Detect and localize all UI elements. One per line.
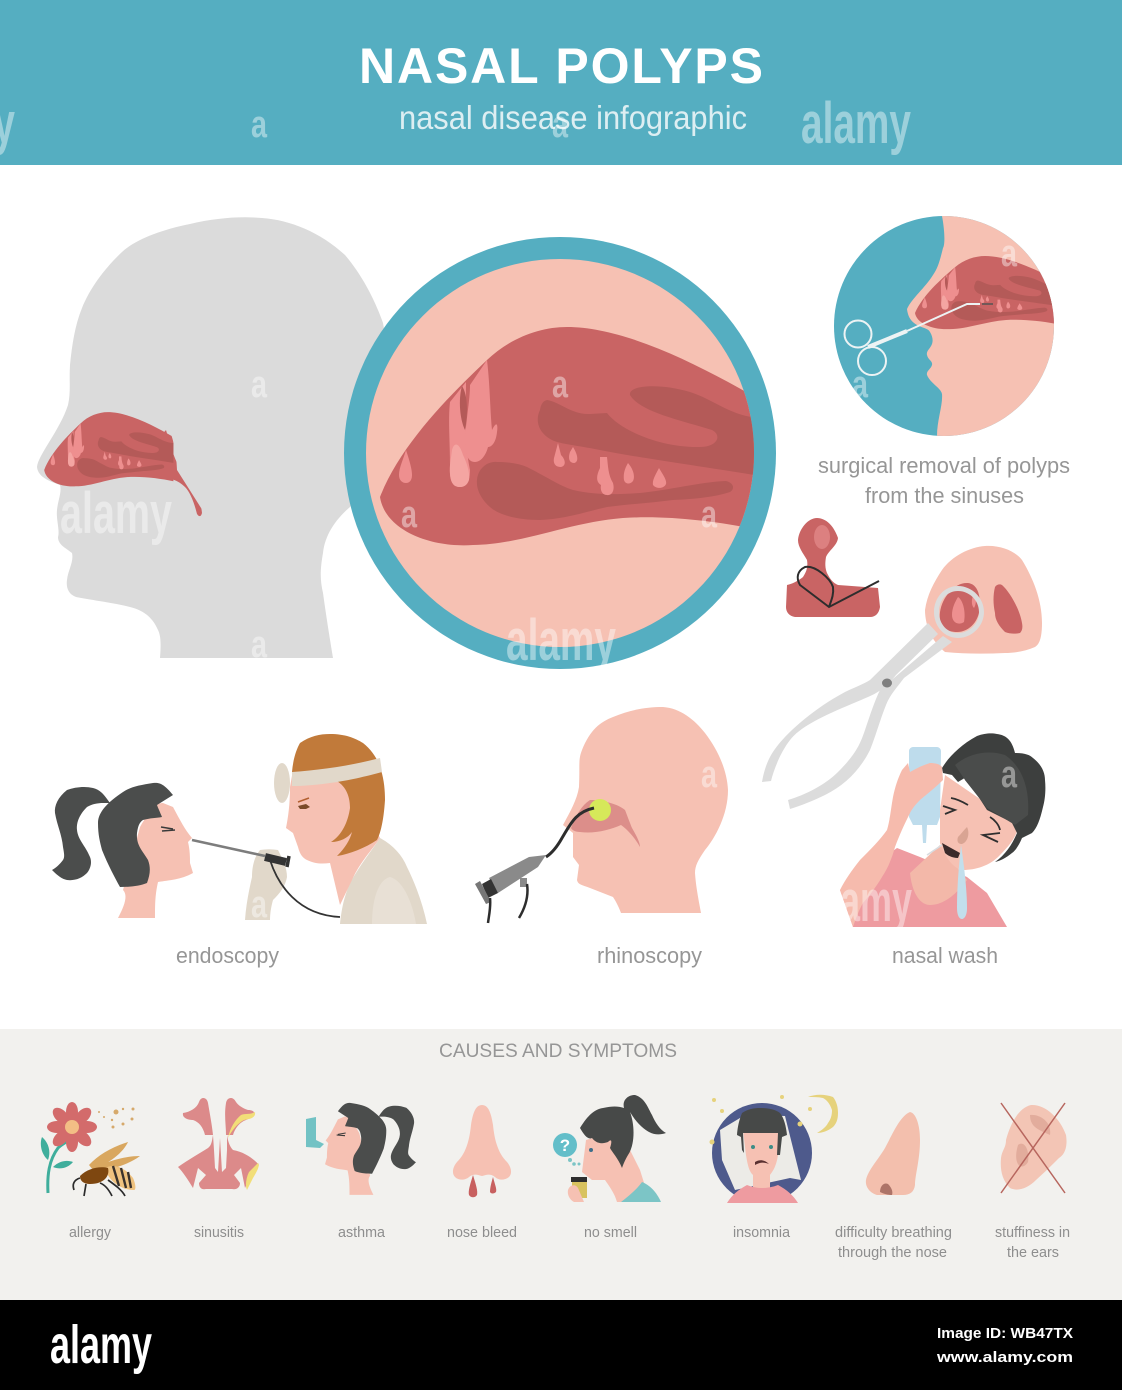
watermarks: a <box>1001 754 1018 796</box>
icon: crossed out ear <box>1001 1103 1067 1193</box>
magnified sinus circle <box>344 237 776 669</box>
grey head profile with sinus <box>37 217 400 658</box>
shirt <box>840 848 1007 927</box>
icon: side nose <box>866 1112 920 1195</box>
endoscopy illustration <box>52 734 427 924</box>
endoscope handle <box>265 857 286 862</box>
nose with forceps <box>762 546 1042 809</box>
watermarks: a <box>251 364 268 406</box>
icon: no smell: ? <box>560 1136 570 1155</box>
rhinoscopy label: rhinoscopy <box>597 943 702 968</box>
watermarks: alamy <box>801 91 911 156</box>
watermarks: a <box>552 104 569 146</box>
difficulty breathing label: difficulty breathing <box>835 1224 952 1241</box>
neck <box>910 845 967 905</box>
stuffiness label <box>995 1224 1070 1261</box>
smelling jar <box>571 1177 587 1182</box>
insomnia label: insomnia <box>733 1224 791 1241</box>
hair <box>942 733 1045 862</box>
watermarks: a <box>552 364 569 406</box>
watermarks: a <box>852 364 869 406</box>
cable <box>270 860 340 917</box>
watermarks: amy <box>840 869 912 934</box>
stars <box>710 1095 812 1144</box>
section heading: CAUSES AND SYMPTOMS <box>439 1041 677 1062</box>
footer url: www.alamy.com <box>936 1349 1073 1366</box>
surgical label: surgical removal of polyps <box>818 453 1070 478</box>
icon: nose bleed <box>453 1105 511 1197</box>
stuffiness label: the ears <box>1007 1244 1059 1261</box>
nose <box>957 827 968 844</box>
glove <box>245 849 287 920</box>
rhinoscope <box>475 808 594 923</box>
rhinoscopy illustration <box>475 707 728 923</box>
allergy label: allergy <box>69 1224 111 1241</box>
watermarks: a <box>701 754 718 796</box>
face profile in circle <box>907 216 1060 436</box>
image id: Image ID: WB47TX <box>937 1325 1073 1342</box>
nasal wash illustration <box>840 733 1045 927</box>
icon: insomnia <box>710 1095 838 1203</box>
bottle <box>909 747 941 843</box>
watermarks: a <box>251 884 268 926</box>
mouth <box>942 843 960 858</box>
icon: sinusitis <box>178 1098 259 1190</box>
watermarks: a <box>701 494 718 536</box>
watermarks: alamy <box>506 608 616 673</box>
footer bar <box>0 1300 1122 1390</box>
asthma label: asthma <box>338 1224 386 1241</box>
water stream <box>957 845 967 919</box>
moon <box>808 1095 838 1133</box>
no smell label: no smell <box>584 1224 637 1241</box>
watermarks: a <box>1001 233 1018 275</box>
nasal wash label: nasal wash <box>892 943 998 968</box>
doctor <box>192 734 427 924</box>
surgical label: from the sinuses <box>865 483 1024 508</box>
difficulty breathing label <box>835 1224 952 1261</box>
icon: no smell <box>553 1095 666 1202</box>
watermarks: a <box>251 104 268 146</box>
surgical label <box>818 453 1070 508</box>
surgical removal illustration <box>834 216 1060 436</box>
stuffiness label: stuffiness in <box>995 1224 1070 1241</box>
subtitle: nasal disease infographic <box>399 99 747 136</box>
forceps <box>762 586 984 809</box>
header band <box>0 0 1122 165</box>
watermarks: a <box>251 624 268 666</box>
difficulty breathing label: through the nose <box>838 1244 947 1261</box>
face <box>940 775 1018 870</box>
sinus with light <box>571 800 640 847</box>
icon: asthma inhaler and woman <box>306 1103 416 1195</box>
watermarks <box>0 91 1018 934</box>
polyp with snare <box>786 518 880 617</box>
footer logo: alamy <box>50 1315 152 1375</box>
endoscope tube <box>192 840 265 856</box>
panel: causes and symptoms <box>0 1029 1122 1300</box>
patient with ponytail <box>52 783 193 918</box>
sinusitis label: sinusitis <box>194 1224 244 1241</box>
title: NASAL POLYPS <box>359 38 763 94</box>
icon: allergy flower and wasp <box>41 1102 140 1196</box>
watermarks: a <box>401 494 418 536</box>
thought bubble <box>553 1133 577 1157</box>
surgical scissors <box>844 304 993 375</box>
nose bleed label: nose bleed <box>447 1224 517 1241</box>
arm and hand <box>840 763 943 927</box>
eyes and mouth <box>943 798 1000 842</box>
watermarks: alamy <box>60 481 172 546</box>
sinus in head <box>44 412 202 516</box>
endoscopy label: endoscopy <box>176 943 279 968</box>
